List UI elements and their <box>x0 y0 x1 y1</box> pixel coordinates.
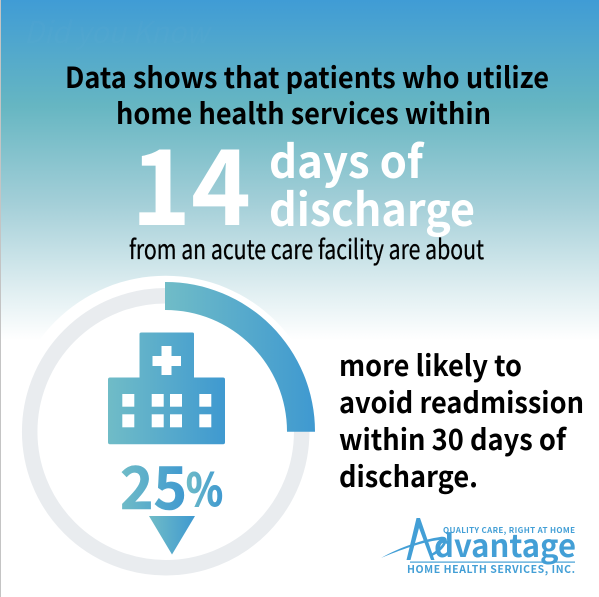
stat: 25%: 25 <box>120 441 187 526</box>
ring chart: 25 percent <box>10 276 322 588</box>
stat: 25%: % <box>186 454 223 519</box>
faint watermark text: Did you Know <box>24 8 213 52</box>
heading: intro statement: home health services within <box>116 91 491 133</box>
icon: hospital <box>108 332 225 444</box>
text: more likely to avoid readmission: within 30 days of <box>339 417 567 459</box>
icon: down arrow <box>149 516 195 554</box>
logo wordmark: dvantage <box>434 521 576 566</box>
background gradient panel <box>0 0 599 340</box>
subheading: days of discharge: days of <box>269 126 425 191</box>
logo tagline: QUALITY CARE, RIGHT AT HOME <box>443 525 575 536</box>
logo: Advantage Home Health Services <box>381 518 576 577</box>
subheading: days of discharge <box>269 126 475 239</box>
stat: 25% <box>120 441 223 526</box>
subheading: days of discharge: discharge <box>269 174 475 239</box>
text: more likely to avoid readmission: discharge. <box>339 454 478 496</box>
heading: intro statement: Data shows that patients who utilize <box>65 55 549 97</box>
text: from an acute care facility: from an acute care facility are about <box>129 228 484 267</box>
logo mark: A with swoosh <box>406 518 434 560</box>
edge lines <box>0 0 1 597</box>
logo subtitle: HOME HEALTH SERVICES, INC. <box>407 562 575 577</box>
arc: quarter highlight <box>165 282 315 432</box>
text: more likely to avoid readmission <box>339 343 584 496</box>
heading: intro statement <box>65 55 549 133</box>
big number: 14: 14 <box>131 104 251 256</box>
text: more likely to avoid readmission: more likely to <box>339 343 522 385</box>
text: more likely to avoid readmission: avoid readmission <box>339 380 584 422</box>
